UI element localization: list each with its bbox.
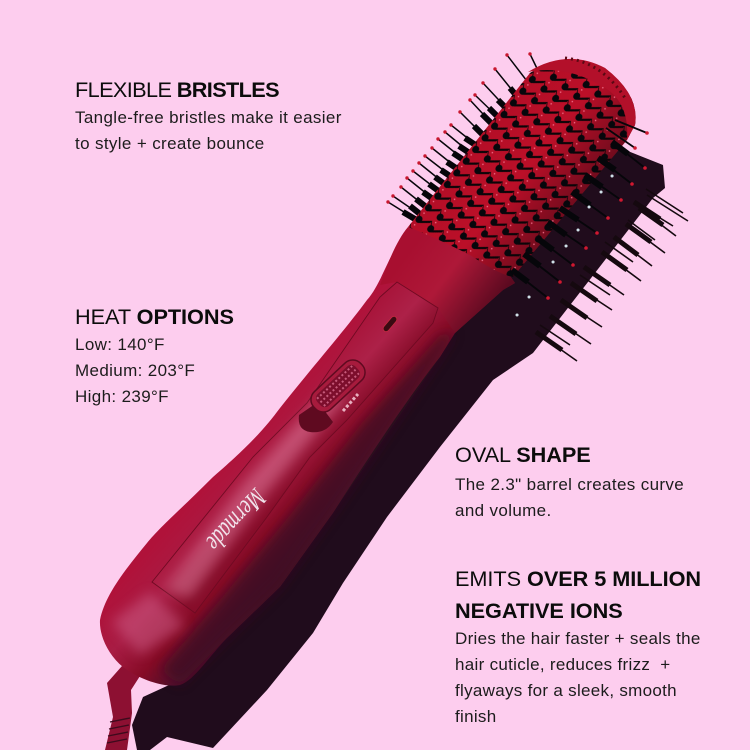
description: The 2.3" barrel creates curve (455, 475, 684, 494)
heading: FLEXIBLE BRISTLES (75, 77, 279, 102)
heat setting marks (343, 394, 358, 411)
temperature list: Medium: 203°F (75, 361, 195, 380)
brush head (380, 40, 650, 315)
slider switch (306, 355, 370, 417)
description: flyaways for a sleek, smooth (455, 681, 677, 700)
description: Dries the hair faster + seals the (455, 629, 701, 648)
description: finish (455, 707, 496, 726)
description: to style + create bounce (75, 134, 265, 153)
description: and volume. (455, 501, 552, 520)
LED slot (382, 315, 398, 333)
right bristles (512, 120, 647, 315)
description (455, 629, 701, 726)
sheen on plate (165, 385, 345, 598)
shaded underside (160, 333, 455, 685)
sheen on butt end (112, 592, 185, 655)
left bristles (388, 54, 545, 222)
heading (455, 566, 701, 623)
heading: EMITS OVER 5 MILLION (455, 566, 701, 591)
power cord (105, 666, 140, 750)
handle (100, 227, 515, 686)
logo script: Mermade (200, 482, 273, 557)
drop shadow of the brush (132, 140, 688, 750)
feature: heat options (75, 304, 234, 406)
description (75, 108, 342, 153)
temperature list: Low: 140°F (75, 335, 165, 354)
description (455, 475, 684, 520)
heading: HEAT OPTIONS (75, 304, 234, 329)
feature: oval shape (455, 442, 684, 520)
description: Tangle-free bristles make it easier (75, 108, 342, 127)
heading: OVAL SHAPE (455, 442, 591, 467)
collar (380, 227, 515, 333)
face plate (152, 282, 438, 613)
feature: negative ions (455, 566, 701, 726)
slider slot (299, 402, 333, 432)
heading: NEGATIVE IONS (455, 598, 623, 623)
temperature list (75, 335, 195, 406)
feature: flexible bristles (75, 77, 342, 153)
shadow bristles (536, 189, 688, 361)
description: hair cuticle, reduces frizz + (455, 655, 670, 674)
product illustration: hair dryer brush (100, 52, 688, 750)
barrel (408, 56, 636, 277)
barrel holes and bristle rows (409, 70, 636, 277)
temperature list: High: 239°F (75, 387, 169, 406)
barrel end cap (528, 59, 636, 140)
